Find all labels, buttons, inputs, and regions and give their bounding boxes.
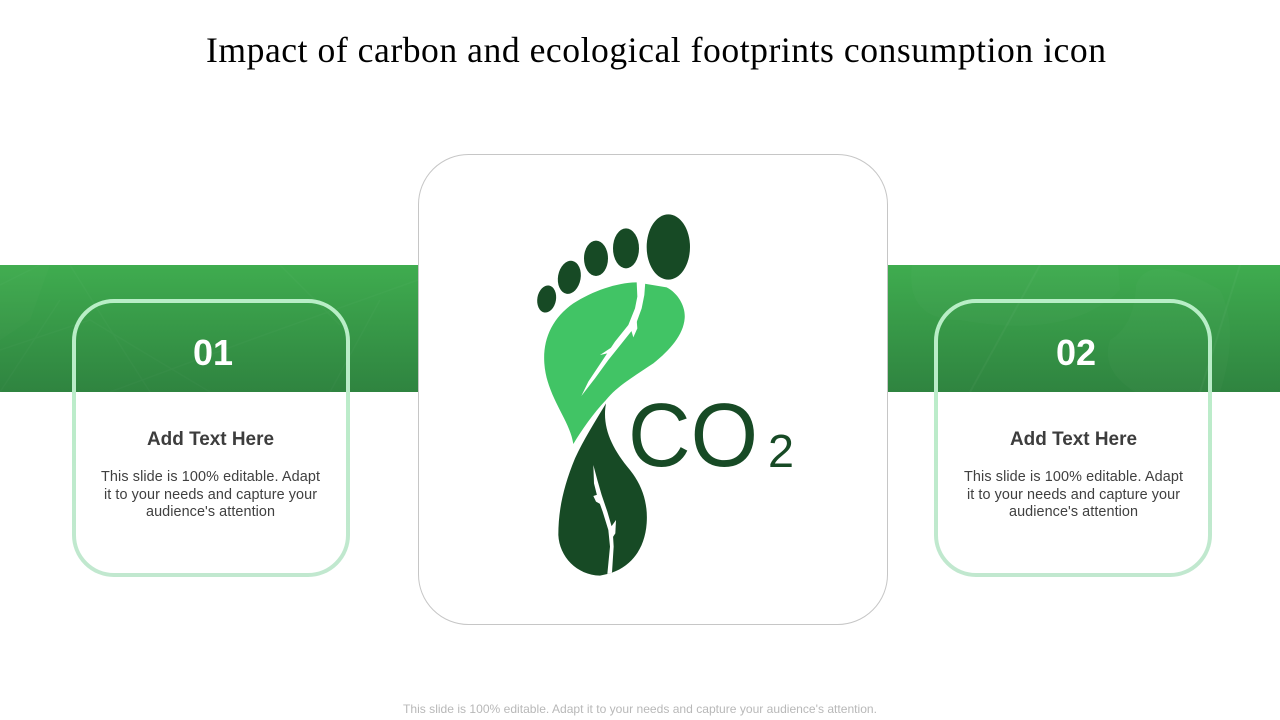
card body text: audience's attention [146, 504, 275, 520]
co2 label: 2 [768, 425, 794, 477]
co2 label: CO [628, 386, 758, 486]
card heading: Add Text Here [147, 429, 274, 450]
dark leaf vein [593, 465, 616, 574]
card body text: This slide is 100% editable. Adapt [964, 469, 1183, 485]
card body text: This slide is 100% editable. Adapt [101, 469, 320, 485]
card body text: it to your needs and capture your [967, 487, 1180, 503]
toes [535, 214, 690, 314]
center panel: footprint icon [418, 154, 888, 624]
card body text: it to your needs and capture your [104, 487, 317, 503]
light leaf vein [581, 282, 645, 396]
card body text [101, 469, 320, 520]
card 01 [74, 301, 348, 575]
card body text [964, 469, 1183, 520]
icon: carbon footprint [535, 214, 690, 576]
footer note: This slide is 100% editable. Adapt it to your needs and capture your audience's attention. [403, 702, 877, 716]
dark leaf [558, 403, 647, 576]
card outline [936, 301, 1210, 575]
light leaf [544, 282, 685, 444]
card 02 [936, 301, 1210, 575]
card outline [74, 301, 348, 575]
card body text: audience's attention [1009, 504, 1138, 520]
left green band [0, 265, 418, 392]
card heading: Add Text Here [1010, 429, 1137, 450]
title: Impact of carbon and ecological footprints consumption icon [206, 30, 1106, 70]
number 01: 01 [193, 332, 233, 373]
number 02: 02 [1056, 332, 1096, 373]
right green band [888, 265, 1280, 392]
